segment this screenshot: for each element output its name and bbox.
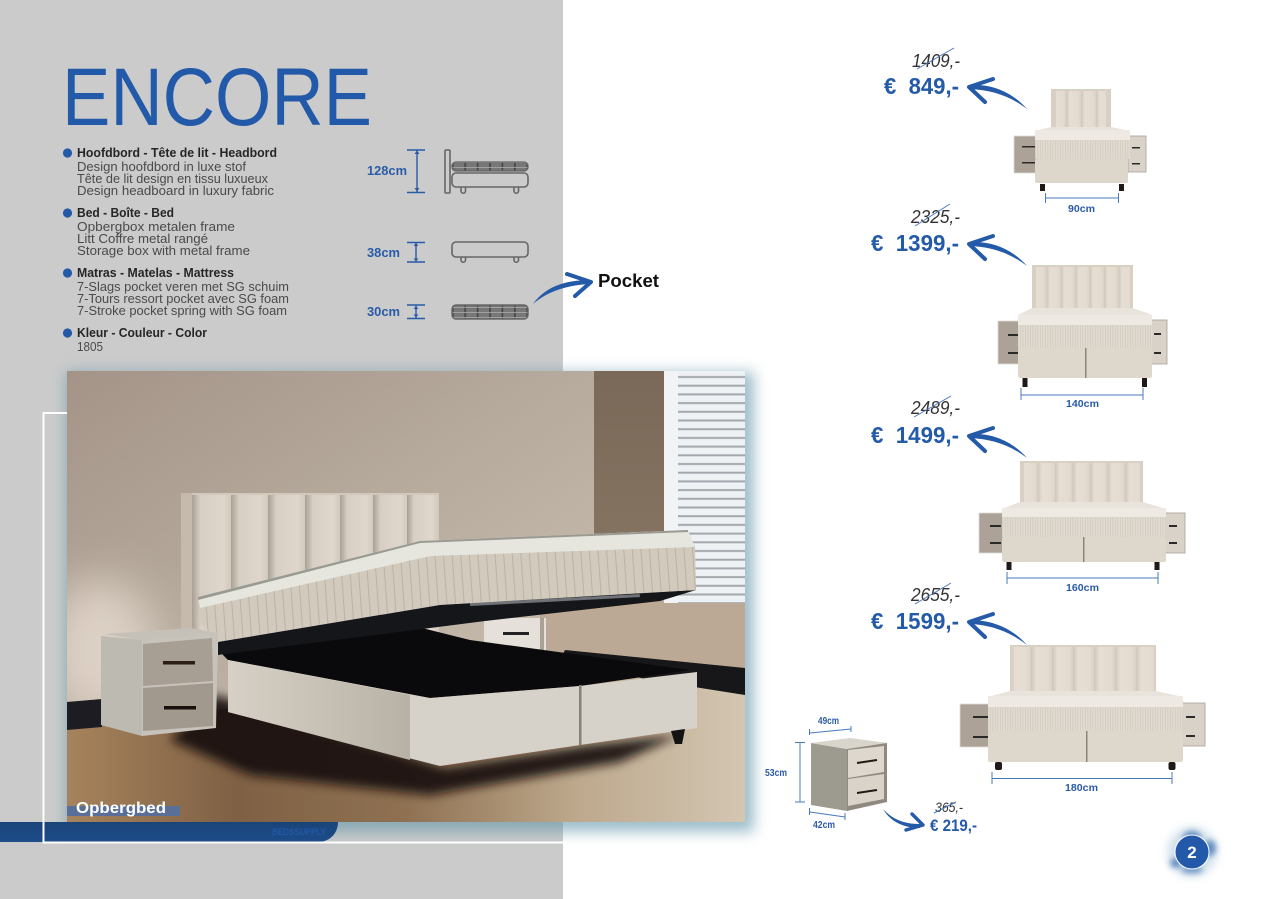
arrow: 180cm [969, 614, 1027, 645]
dimension: 38cm box height [367, 242, 425, 262]
spec: bed [63, 205, 250, 258]
headboard [181, 493, 439, 655]
spec: bed: Opbergbox metalen frame [77, 220, 235, 234]
specification list [63, 145, 289, 354]
price: nightstand: € 219,- [930, 817, 977, 835]
spec: mattress [63, 265, 289, 318]
icon: full bed side view [445, 150, 528, 193]
dimension: 128cm total height [367, 150, 425, 192]
width dimension [992, 772, 1172, 794]
price: single 90cm: 1409,- [912, 51, 960, 71]
spec: headboard: Design hoofdbord in luxe stof [77, 160, 247, 174]
dimension: 30cm mattress height: 30cm [367, 305, 400, 319]
footer band [0, 822, 338, 842]
spec: mattress: 7-Stroke pocket spring with SG foam [77, 304, 287, 318]
price: 180cm: € 1599,- [871, 608, 959, 634]
label: Pocket: Pocket [598, 270, 659, 291]
spec: colour: Kleur - Couleur - Color [77, 325, 207, 340]
product: bed 180cm [960, 645, 1205, 794]
nightstand [101, 628, 218, 736]
nightstand dimensions: 49cm [818, 716, 839, 727]
photo shadow [66, 372, 754, 832]
page number badge [1168, 828, 1216, 876]
brand mark: BEDSSUPPLY [272, 827, 326, 837]
arrow: 140cm [969, 236, 1027, 266]
lift frame [218, 590, 696, 655]
spec: headboard: Tête de lit design en tissu luxueux [77, 172, 269, 186]
background panel: grey left side [0, 0, 563, 899]
product: bed 140cm [998, 265, 1167, 410]
spec: bed: Litt Coffre metal rangé [77, 232, 208, 246]
icon: box side view [452, 242, 528, 262]
spec: colour: 1805 [77, 340, 103, 354]
nightstand dimensions: 42cm [813, 820, 835, 831]
price: 160cm [871, 396, 960, 448]
spec: mattress: Matras - Matelas - Mattress [77, 265, 234, 280]
width dimension: 180cm [1065, 783, 1098, 794]
arrow: nightstand price [883, 809, 923, 830]
bed base [228, 660, 697, 766]
spec: colour [63, 325, 207, 354]
price: single 90cm: € 849,- [884, 73, 959, 99]
dimension: 38cm box height: 38cm [367, 246, 400, 260]
window blinds [664, 371, 745, 603]
floor shadow under bed [170, 695, 680, 795]
nightstand dimensions [765, 716, 851, 831]
caption: Opbergbed [76, 800, 166, 817]
width dimension: 160cm [1066, 583, 1099, 594]
spec: headboard [63, 145, 277, 198]
price: 160cm: € 1499,- [871, 422, 959, 448]
icon: pocket mattress side view [452, 305, 528, 319]
price: 140cm: € 1399,- [871, 230, 959, 256]
price: 180cm [871, 583, 960, 634]
width dimension [1021, 388, 1143, 410]
page number badge: 2 [1187, 843, 1197, 862]
arrow: 160cm [969, 428, 1027, 458]
wall [67, 371, 595, 711]
price: 140cm: 2325,- [910, 207, 960, 227]
dimension: 30cm mattress height [367, 305, 425, 319]
product: bed 90cm [1014, 89, 1146, 215]
title: ENCORE [62, 52, 372, 143]
price: 180cm: 2655,- [910, 585, 960, 605]
price: nightstand: 365,- [935, 800, 963, 815]
storage interior [218, 625, 690, 698]
caption strip [67, 806, 180, 816]
spec: headboard: Hoofdbord - Tête de lit - Headbord [77, 145, 277, 160]
dimension: 128cm total height: 128cm [367, 164, 407, 178]
white frame line [44, 413, 563, 842]
spec: bed: Storage box with metal frame [77, 244, 250, 258]
arrow: to Pocket [533, 274, 591, 304]
nightstand dimensions: 53cm [765, 768, 787, 779]
arrow: 90cm [969, 79, 1027, 109]
width dimension: 140cm [1066, 399, 1099, 410]
price: 140cm [871, 204, 960, 256]
product: bed 160cm [979, 461, 1185, 594]
spec: mattress: 7-Tours ressort pocket avec SG foam [77, 292, 289, 306]
width dimension: 90cm [1068, 204, 1095, 215]
price: single 90cm [884, 48, 960, 99]
spec: headboard: Design headboard in luxury fabric [77, 184, 274, 198]
baseboards [67, 699, 102, 730]
price: 160cm: 2489,- [910, 398, 960, 418]
product: nightstand [811, 738, 888, 811]
width dimension [1007, 572, 1158, 594]
price: nightstand [930, 800, 977, 835]
floor [67, 678, 745, 822]
spec: bed: Bed - Boîte - Bed [77, 205, 174, 220]
second nightstand behind [484, 618, 546, 654]
photo: storage bed in bedroom [45, 371, 745, 822]
mattress [198, 530, 696, 642]
spec: mattress: 7-Slags pocket veren met SG schuim [77, 280, 289, 294]
